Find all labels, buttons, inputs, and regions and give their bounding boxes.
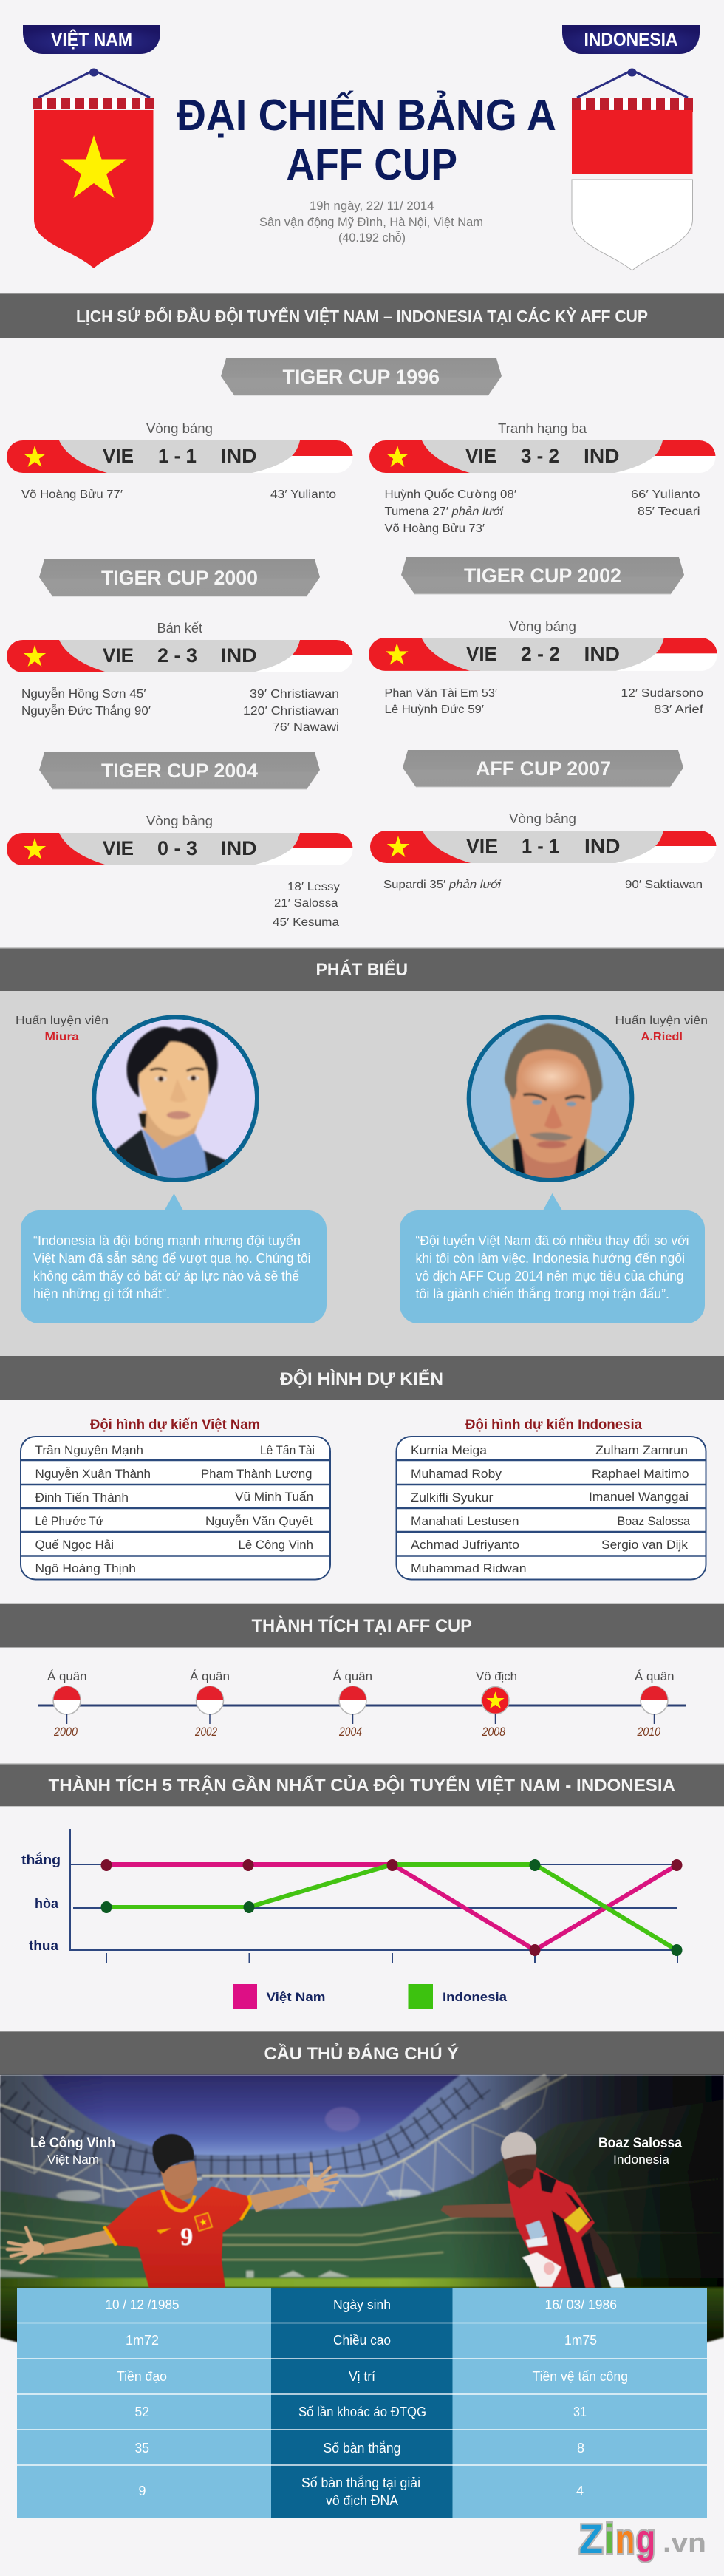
label: Việt Nam: VIỆT NAM: [51, 28, 132, 50]
logo: Zing.vn: [579, 2515, 706, 2562]
lineup: Vietnam: Nguyễn Xuân Thành: [35, 1467, 151, 1481]
match 2007 group stage: 90′ Saktiawan: [625, 879, 703, 891]
sky: [42, 2075, 460, 2156]
player caption: Lê Công Vinh: Việt Nam: [47, 2153, 99, 2167]
row: caps: [134, 2405, 587, 2419]
label: Việt Nam: [23, 25, 160, 54]
match 1996 third place: VIE: [465, 445, 496, 467]
callout: Miura quote: hiện những gì tốt nhất”.: [33, 1287, 170, 1301]
match 2004 group stage: Vòng bảng: [146, 814, 213, 828]
row: caps: 31: [573, 2405, 587, 2419]
match information: [259, 199, 483, 245]
lineup: Vietnam: Lê Công Vinh: [238, 1539, 313, 1552]
tag: AFF Cup 2007: [403, 750, 683, 787]
match 1996 third place: Huỳnh Quốc Cường 08′: [384, 488, 516, 501]
player: Lê Công Vinh: 9: [180, 2224, 193, 2251]
lineup: Vietnam: Ngô Hoàng Thịnh: [35, 1562, 136, 1575]
match 2002 group stage: 2 - 2: [521, 643, 560, 665]
line chart: thua: [29, 1938, 59, 1953]
heading band: statements: [0, 947, 724, 991]
header: [23, 25, 700, 270]
match 2007 group stage: 1 - 1: [522, 835, 559, 857]
heading band: history: [0, 293, 724, 338]
timeline axis: [38, 1704, 686, 1707]
row: height: [126, 2333, 597, 2348]
milestone 2000: 2000: [53, 1725, 78, 1739]
tag: Tiger Cup 2002: [401, 557, 684, 594]
lineup: Vietnam: Trần Nguyên Mạnh: [35, 1444, 143, 1457]
match 1996 third place: 66′ Yulianto: [631, 488, 700, 501]
match 2004 group stage: 18′ Lessy: [287, 881, 340, 893]
milestone 2008: [476, 1669, 517, 1739]
heading band: players: [0, 2031, 724, 2075]
match 1996 third place: 85′ Tecuari: [638, 505, 700, 518]
lineup: Vietnam: Phạm Thành Lương: [201, 1468, 312, 1481]
match 2000 semi-final: Bán kết: [157, 621, 202, 636]
row: goals: 8: [577, 2441, 584, 2456]
callout: Riedl quote: khi tôi còn làm việc. Indonesia hướng đến ngôi: [415, 1251, 685, 1266]
milestone 2002: [190, 1669, 230, 1739]
milestone 2002: 2002: [194, 1725, 217, 1739]
Việt Nam points: [100, 1859, 683, 1956]
row: regional goals: 4: [576, 2484, 584, 2498]
lineup: Indonesia: Đội hình dự kiến Indonesia: [465, 1417, 642, 1433]
row: position: Tiền đạo: [117, 2369, 167, 2384]
match 2000 semi-final: 39′ Christiawan: [250, 688, 339, 701]
row: regional goals: [139, 2475, 584, 2508]
row: regional goals: 9: [139, 2484, 146, 2498]
tag: Tiger Cup 1996: TIGER CUP 1996: [282, 366, 440, 388]
edge shade: [0, 2075, 724, 2288]
portrait: A.Riedl: [469, 1017, 632, 1185]
match 2000 semi-final: 2 - 3: [157, 644, 197, 667]
portrait: Miura: [94, 1017, 257, 1185]
match 1996 group stage: IND: [221, 445, 257, 467]
label: Indonesia: [562, 25, 700, 54]
title: [177, 90, 556, 189]
player: Boaz Salossa: [441, 2132, 625, 2288]
row: regional goals: Số bàn thắng tại giải: [301, 2475, 420, 2490]
coach name: A.Riedl: Huấn luyện viên: [615, 1015, 708, 1027]
lineup: Indonesia: Zulham Zamrun: [595, 1444, 688, 1457]
heading band: lineups: ĐỘI HÌNH DỰ KIẾN: [280, 1369, 443, 1389]
milestone 2004: [332, 1669, 372, 1739]
match 2000 semi-final: IND: [221, 644, 257, 667]
lineup: Vietnam: Đội hình dự kiến Việt Nam: [90, 1417, 260, 1433]
match 2002 group stage: IND: [584, 643, 620, 665]
tag: Tiger Cup 2000: [39, 559, 320, 596]
lineup: Indonesia: Muhamad Roby: [411, 1468, 502, 1481]
match 2000 semi-final: Nguyễn Hồng Sơn 45′: [21, 686, 146, 701]
coach name: Miura: Miura: [44, 1031, 79, 1043]
heading band: history: LỊCH SỬ ĐỐI ĐẦU ĐỘI TUYỂN VIỆT NAM – INDONESIA TẠI CÁC KỲ AFF CUP: [76, 305, 648, 326]
match information: Sân vận động Mỹ Đình, Hà Nội, Việt Nam: [259, 215, 483, 229]
lineup: Vietnam: Lê Tấn Tài: [260, 1444, 315, 1457]
pennant: Indonesia flag: [572, 68, 693, 270]
legend: Việt Nam: [266, 1990, 325, 2004]
row: regional goals: vô địch ĐNA: [326, 2493, 398, 2508]
match 1996 group stage: Vòng bảng: [146, 421, 213, 436]
row: goals: [134, 2440, 584, 2456]
roof and trusses: [0, 2075, 724, 2209]
player: Lê Công Vinh: [7, 2134, 338, 2288]
match 2000 semi-final: VIE: [103, 644, 134, 667]
match 2002 group stage: VIE: [466, 643, 497, 665]
lineup: Indonesia: Imanuel Wanggai: [589, 1490, 689, 1504]
lineup: Vietnam: Nguyễn Văn Quyết: [205, 1514, 313, 1528]
match 2002 group stage: [369, 619, 717, 716]
tag: Tiger Cup 2002: TIGER CUP 2002: [464, 565, 621, 587]
callout: Riedl quote: tôi là giành chiến thắng trong mọi trận đấu”.: [415, 1286, 669, 1301]
lineup: Vietnam: Quế Ngọc Hải: [35, 1539, 114, 1552]
label: Indonesia: INDONESIA: [584, 30, 678, 50]
heading band: statements: PHÁT BIỂU: [316, 959, 408, 980]
heading band: last five: THÀNH TÍCH 5 TRẬN GẦN NHẤT CỦA ĐỘI TUYỂN VIỆT NAM - INDONESIA: [49, 1774, 675, 1796]
milestone 2010: [635, 1669, 674, 1739]
row: position: Tiền vệ tấn công: [532, 2369, 628, 2384]
panel: head-to-head history: [0, 293, 724, 929]
coach name: A.Riedl: A.Riedl: [641, 1031, 683, 1043]
match 1996 third place: Tumena 27′ phản lưới: [384, 505, 503, 518]
callout: Miura quote: [21, 1193, 327, 1323]
coach name: A.Riedl: [615, 1015, 708, 1043]
milestone 2008: Vô địch: [476, 1669, 517, 1683]
row: height: Chiều cao: [333, 2333, 391, 2348]
Việt Nam series: [106, 1864, 677, 1950]
title: AFF CUP: [287, 140, 457, 189]
line chart: [21, 1829, 683, 1963]
Indonesia series: [106, 1864, 677, 1950]
Indonesia points: [100, 1859, 683, 1956]
heading band: last five: [0, 1763, 724, 1807]
lineup: Vietnam: Vũ Minh Tuấn: [235, 1490, 313, 1504]
match 2002 group stage: 12′ Sudarsono: [621, 687, 703, 700]
tag: Tiger Cup 2004: TIGER CUP 2004: [101, 760, 258, 782]
tag: AFF Cup 2007: AFF CUP 2007: [476, 757, 611, 780]
comparison table: [17, 2288, 707, 2518]
match 2004 group stage: 21′ Salossa: [274, 897, 338, 910]
match 2000 semi-final: [7, 621, 353, 734]
row: birth date: [105, 2297, 617, 2312]
match 1996 third place: Tranh hạng ba: [498, 421, 587, 436]
player caption: Lê Công Vinh: [30, 2136, 115, 2167]
match 2004 group stage: 0 - 3: [157, 837, 197, 859]
player caption: Lê Công Vinh: Lê Công Vinh: [30, 2136, 115, 2151]
match 2000 semi-final: 120′ Christiawan: [243, 705, 339, 718]
match 1996 third place: [369, 421, 716, 535]
match 1996 third place: Võ Hoàng Bửu 73′: [384, 522, 485, 535]
milestone 2000: Á quân: [47, 1669, 87, 1683]
callout: Riedl quote: [400, 1193, 705, 1323]
callout: Miura quote: “Indonesia là đội bóng mạnh nhưng đội tuyển: [33, 1233, 301, 1248]
match 2000 semi-final: 76′ Nawawi: [273, 721, 339, 734]
milestone 2004: Á quân: [332, 1669, 372, 1683]
match 2007 group stage: VIE: [466, 835, 498, 857]
match 2004 group stage: [7, 814, 353, 929]
lineup: Vietnam: Đinh Tiến Thành: [35, 1491, 129, 1505]
match information: 19h ngày, 22/ 11/ 2014: [310, 199, 434, 213]
match 2007 group stage: Supardi 35′ phản lưới: [383, 879, 501, 891]
lineup: Indonesia: Raphael Maitimo: [592, 1468, 689, 1481]
match 2004 group stage: IND: [221, 837, 257, 859]
match 2004 group stage: VIE: [103, 837, 134, 859]
match 2002 group stage: 83′ Arief: [654, 703, 704, 716]
row: goals: Số bàn thắng: [324, 2440, 400, 2456]
match 2004 group stage: 45′ Kesuma: [273, 916, 339, 929]
callout: Miura quote: không cảm thấy có bất cứ áp lực nào và sẽ thể: [33, 1269, 299, 1284]
logo: Zing.vn: i: [605, 2515, 614, 2562]
panel: last five matches chart: [0, 1763, 724, 2009]
tag: Tiger Cup 1996: [221, 358, 502, 395]
match 2002 group stage: Phan Văn Tài Em 53′: [384, 687, 497, 700]
panel: AFF Cup record timeline: [0, 1603, 724, 1739]
lineup: Indonesia: [396, 1417, 706, 1580]
stadium photo illustration: [0, 2075, 724, 2342]
callout: Riedl quote: “Đội tuyển Việt Nam đã có nhiều thay đổi so với: [415, 1233, 689, 1248]
stands: [0, 2099, 724, 2280]
lineup: Indonesia: Muhammad Ridwan: [411, 1562, 526, 1575]
match 2007 group stage: IND: [584, 835, 621, 857]
row: height: 1m72: [126, 2333, 159, 2348]
match 1996 group stage: Võ Hoàng Bửu 77′: [21, 488, 123, 501]
line chart: hòa: [35, 1896, 59, 1911]
lineup: Indonesia: Boaz Salossa: [618, 1515, 691, 1528]
tag: Tiger Cup 2000: TIGER CUP 2000: [101, 567, 258, 589]
heading band: record: THÀNH TÍCH TẠI AFF CUP: [251, 1615, 472, 1636]
row: height: 1m75: [564, 2333, 597, 2348]
match 2007 group stage: [370, 811, 717, 891]
line chart: thắng: [21, 1852, 61, 1867]
lineup: Indonesia: Manahati Lestusen: [411, 1515, 519, 1528]
row: position: Vị trí: [349, 2369, 375, 2384]
match 2007 group stage: Vòng bảng: [509, 811, 576, 826]
match 1996 group stage: 43′ Yulianto: [270, 488, 336, 501]
row: birth date: 16/ 03/ 1986: [545, 2297, 617, 2312]
milestone 2000: [47, 1669, 87, 1739]
player caption: Boaz Salossa: Indonesia: [613, 2153, 670, 2167]
match 1996 group stage: [7, 421, 353, 501]
heading band: players: CẦU THỦ ĐÁNG CHÚ Ý: [264, 2042, 459, 2064]
lineup: Indonesia: Achmad Jufriyanto: [411, 1539, 519, 1552]
row: goals: 35: [134, 2441, 149, 2456]
milestone 2002: Á quân: [190, 1669, 230, 1683]
milestone 2008: 2008: [482, 1725, 505, 1739]
row: caps: Số lần khoác áo ĐTQG: [298, 2405, 426, 2419]
tag: Tiger Cup 2004: [39, 752, 320, 789]
match 1996 third place: IND: [584, 445, 619, 467]
row: birth date: Ngày sinh: [333, 2297, 391, 2312]
lineup: Vietnam: Lê Phước Tứ: [35, 1515, 103, 1528]
panel: coach statements: [0, 947, 724, 1356]
match 1996 group stage: 1 - 1: [158, 445, 197, 467]
legend: [233, 1984, 508, 2009]
panel: players to watch: [0, 2031, 724, 2518]
match 1996 third place: 3 - 2: [521, 445, 559, 467]
milestone 2010: Á quân: [635, 1669, 674, 1683]
match information: (40.192 chỗ): [338, 231, 406, 245]
match 1996 group stage: VIE: [103, 445, 134, 467]
pennant: Vietnam flag: [33, 68, 154, 268]
legend: Indonesia: [443, 1990, 508, 2004]
heading band: lineups: [0, 1356, 724, 1400]
row: caps: 52: [134, 2405, 149, 2419]
match 2002 group stage: Vòng bảng: [509, 619, 576, 634]
lineup: Vietnam: [21, 1417, 330, 1580]
coach name: Miura: [16, 1015, 109, 1043]
logo: Zing.vn: n: [616, 2515, 635, 2562]
callout: Miura quote: Việt Nam đã sẵn sàng để vượt qua họ. Chúng tôi: [33, 1251, 310, 1266]
callout: Riedl quote: vô địch AFF Cup 2014 nên mục tiêu của chúng: [415, 1269, 684, 1284]
coach name: Miura: Huấn luyện viên: [16, 1015, 109, 1027]
row: position: [117, 2369, 628, 2384]
player caption: Boaz Salossa: Boaz Salossa: [598, 2136, 682, 2151]
logo: Zing.vn: g: [636, 2515, 655, 2562]
lineup: Indonesia: Kurnia Meiga: [411, 1444, 488, 1457]
pitch: [0, 2278, 724, 2288]
lineup: Indonesia: Sergio van Dijk: [601, 1539, 689, 1552]
heading band: record: [0, 1603, 724, 1648]
logo: Zing.vn: .vn: [663, 2527, 706, 2558]
title: ĐẠI CHIẾN BẢNG A: [177, 90, 556, 140]
player caption: Boaz Salossa: [598, 2136, 682, 2167]
match 2002 group stage: Lê Huỳnh Đức 59′: [384, 703, 484, 716]
logo: Zing.vn: Z: [579, 2515, 603, 2562]
lineup: Indonesia: Zulkifli Syukur: [411, 1491, 494, 1505]
row: birth date: 10 / 12 /1985: [105, 2297, 179, 2312]
milestone 2010: 2010: [637, 1725, 660, 1739]
match 2000 semi-final: Nguyễn Đức Thắng 90′: [21, 703, 151, 718]
milestone 2004: 2004: [338, 1725, 362, 1739]
panel: expected lineups: [0, 1356, 724, 1580]
